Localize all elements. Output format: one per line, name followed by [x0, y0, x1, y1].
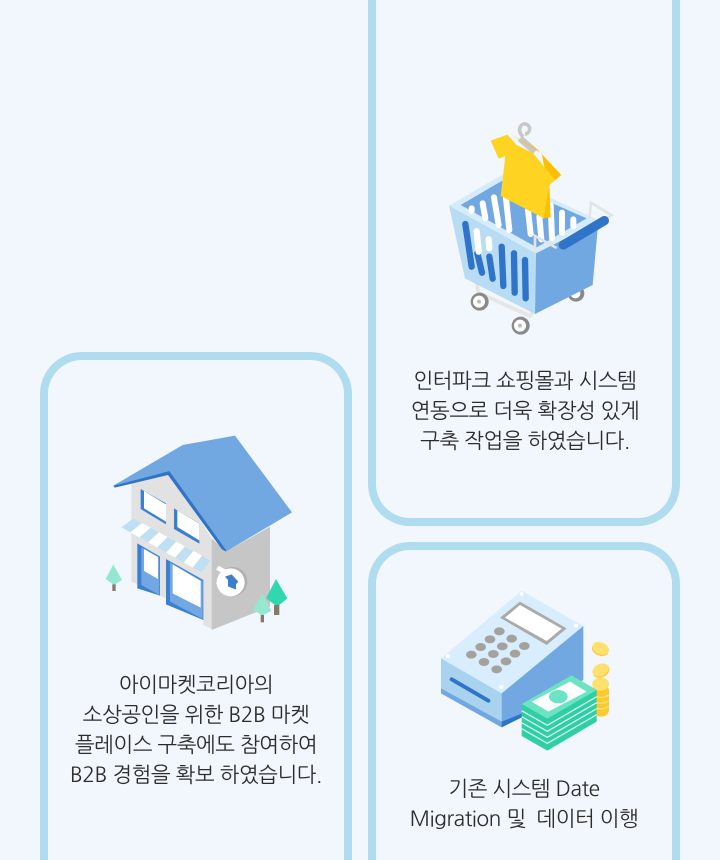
- panel: data migration: [368, 542, 680, 860]
- text: data migration description: 기존 시스템 Date Migration 및 데이터 이행: [410, 779, 638, 830]
- awning: [121, 518, 211, 573]
- icon: shopping cart with shirt: [449, 122, 614, 335]
- text: shopping mall integration description: 인터파크 쇼핑몰과 시스템 연동으로 더욱 확장성 있게 구축 작업을 하였습니다.: [411, 371, 639, 452]
- panel: shopping mall integration: [368, 0, 680, 526]
- icon: storefront house: [106, 436, 292, 630]
- icon: card terminal with cash and coins: [441, 590, 610, 751]
- text: B2B marketplace description: 아이마켓코리아의 소상공인을 위한 B2B 마켓 플레이스 구축에도 참여하여 B2B 경험을 확보 하였습니다.: [70, 675, 322, 786]
- panel: B2B marketplace: [40, 352, 352, 860]
